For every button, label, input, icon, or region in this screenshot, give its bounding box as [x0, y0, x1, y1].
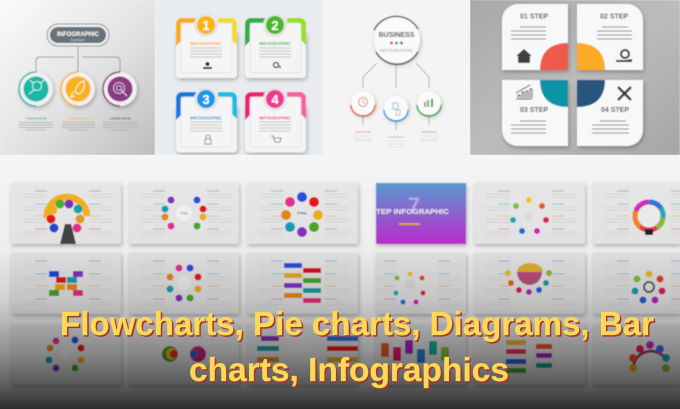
panel: four step: [470, 0, 680, 155]
row 3: [11, 324, 680, 385]
step 2 card: 02 STEP: [600, 14, 628, 20]
slide: 7 step infographic: 7: [408, 193, 420, 218]
title: charts, Infographics: [189, 351, 509, 388]
hexagon wheel: [281, 192, 323, 237]
business circle: INFOGRAPHIC: [380, 48, 414, 54]
slide: 7 step infographic: [376, 193, 450, 225]
card 2: INFOGRAPHIC: [259, 41, 292, 46]
icon: rocket circle: [61, 72, 95, 106]
panel: business infographic: [323, 0, 470, 155]
step 3 card: [502, 80, 568, 146]
connector lines: [36, 46, 120, 72]
triangle ring: [166, 264, 202, 302]
radial petals: [394, 272, 426, 304]
icon: bars: [417, 91, 441, 116]
captions: LOREM IPSUM: [109, 116, 131, 120]
card 1: [176, 13, 237, 78]
row 2: [11, 253, 680, 314]
connector lines: [363, 63, 429, 130]
card 1: 1: [202, 18, 210, 33]
tree diagram: [46, 197, 87, 244]
header pill: INFOGRAPHIC: [57, 32, 100, 38]
hexagon wheel: 8 Step: [297, 211, 307, 215]
panel: numbered cards: [155, 0, 323, 155]
header pill: [47, 24, 109, 46]
hexagon ring small: [46, 336, 84, 372]
title: Flowcharts, Pie charts, Diagrams, Bar: [62, 306, 656, 344]
half bowl: [505, 263, 552, 295]
row 1: [11, 183, 680, 244]
captions: LOREM IPSUM: [67, 116, 89, 120]
card 2: [245, 13, 306, 78]
captions: OVERVIEW: [355, 130, 371, 134]
panel: slide thumbnail grid: [10, 182, 680, 388]
header pill: ELEMENT: [71, 38, 85, 42]
card 4: 4: [271, 92, 279, 107]
title: Flowcharts, Pie charts, Diagrams, Bar: [60, 305, 654, 342]
card 3: 3: [202, 92, 210, 107]
icon: bar chart: [516, 85, 532, 99]
slide: 7 step infographic: TEP INFOGRAPHIC: [376, 207, 450, 216]
card 4: INFOGRAPHIC: [259, 116, 292, 120]
icon: wrench and screwdriver: [618, 87, 631, 100]
business circle: BUSINESS: [379, 32, 415, 39]
captions: OVERVIEW: [421, 130, 437, 134]
icon: gear and hand: [621, 50, 629, 58]
dark gradient overlay: [0, 155, 680, 409]
step 1 card: [502, 4, 568, 70]
icon: target circle: [103, 72, 137, 106]
hanging tags: [381, 340, 449, 363]
icon: document: [384, 96, 408, 121]
circle tags: [257, 336, 358, 364]
captions: OVERVIEW: [388, 135, 404, 139]
icon: house: [516, 49, 532, 63]
card 3: INFOGRAPHIC: [190, 116, 223, 120]
hexagon ring: 5 Step: [180, 212, 188, 215]
concentric circles: [162, 346, 206, 362]
icon: bulb circle: [19, 72, 53, 106]
card 3: [176, 87, 237, 152]
card 4: [245, 87, 306, 152]
bulb spokes: [510, 197, 549, 234]
title: [60, 305, 656, 390]
title: charts, Infographics: [190, 352, 510, 390]
captions: [19, 116, 138, 130]
ribbon bars: [506, 340, 552, 373]
panel: infographic element: [0, 0, 155, 155]
card 2: 2: [271, 18, 279, 33]
hexagon ring: [162, 196, 206, 230]
captions: LOREM IPSUM: [25, 116, 47, 120]
ring diagram: [635, 202, 663, 235]
icon: clock: [351, 91, 375, 116]
card 1: INFOGRAPHIC: [190, 41, 223, 46]
step 1 card: 01 STEP: [520, 14, 548, 20]
paired tags: [284, 263, 321, 303]
gear ring: [632, 270, 666, 304]
step 4 card: [577, 80, 643, 146]
step 2 card: [577, 4, 643, 70]
business circle: [374, 16, 420, 64]
step 4 card: 04 STEP: [601, 107, 629, 114]
X shaped tags: [49, 271, 83, 296]
captions: [354, 130, 438, 147]
pentagon arc: [629, 341, 670, 372]
step 3 card: 03 STEP: [520, 107, 548, 114]
